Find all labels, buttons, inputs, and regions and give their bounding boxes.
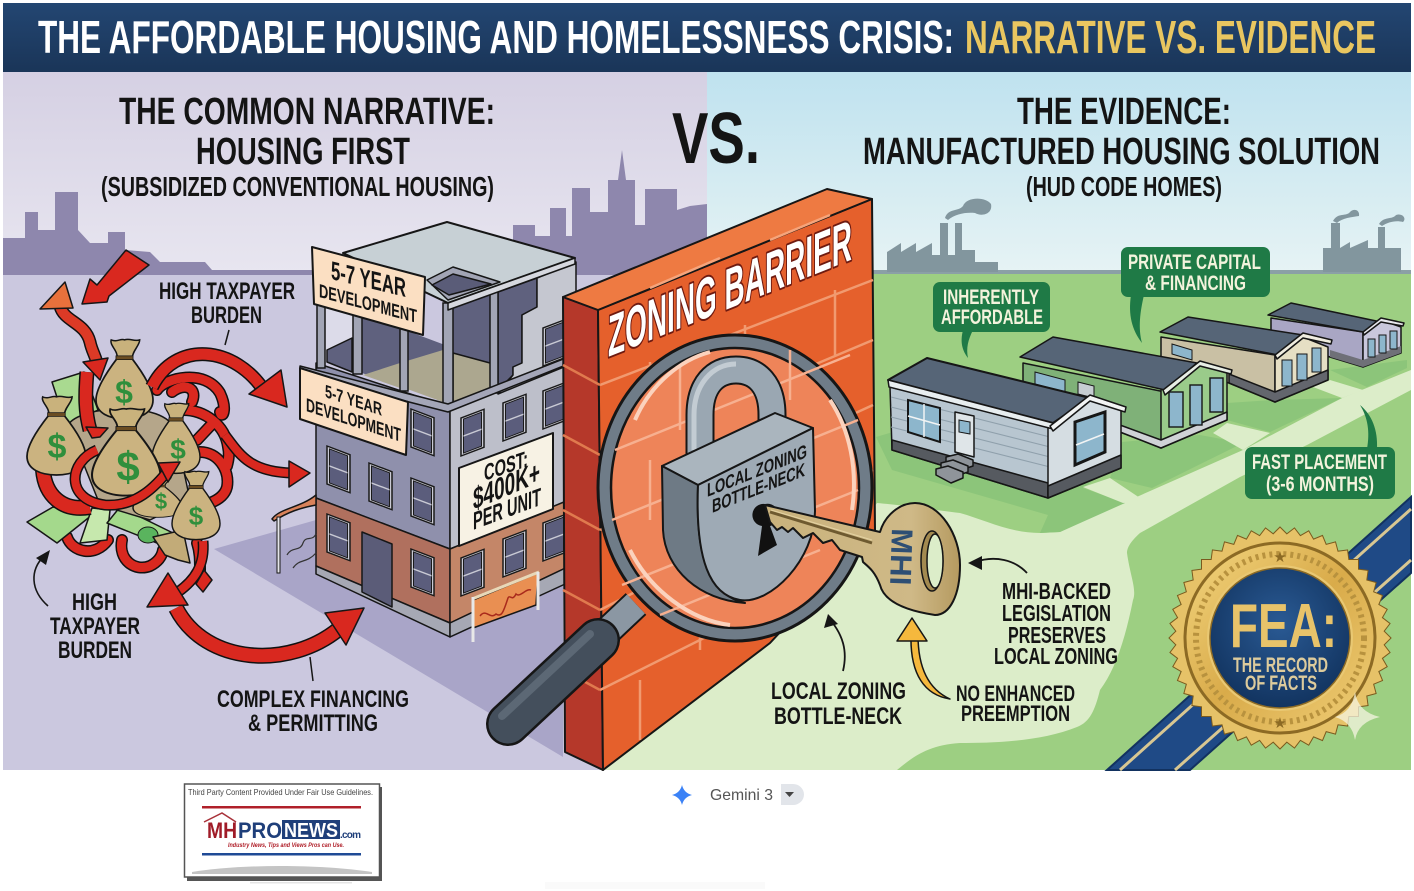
seal: fea record of facts: ★ [1273, 549, 1287, 566]
arrow: local zoning [824, 614, 845, 671]
callout: inherently affordable [933, 282, 1050, 358]
callout: private capital [1121, 247, 1270, 343]
header band [3, 3, 1411, 72]
front window [1075, 412, 1105, 465]
label: complex financing: & PERMITTING [248, 710, 378, 737]
heading: the evidence: THE EVIDENCE: [1017, 91, 1231, 133]
label: complex financing: COMPLEX FINANCING [217, 686, 409, 713]
label: high taxpayer burden left [34, 550, 140, 664]
sign: cost per unit: $400K+ [473, 454, 540, 517]
label: local zoning bottle-neck: LOCAL ZONING [771, 678, 906, 705]
arrow: orange up squiggle [40, 282, 108, 380]
magnifying glass [502, 335, 872, 724]
sign: cost per unit: COST: [484, 447, 528, 487]
sign: 5-7 year development upper: 5-7 YEAR [331, 255, 406, 303]
callout: private capital: PRIVATE CAPITAL [1128, 251, 1261, 274]
back swirls [60, 378, 229, 570]
shackle [694, 364, 772, 465]
padlock label: LOCAL ZONING [707, 441, 807, 502]
skyline right [500, 150, 707, 275]
brown backing [68, 409, 190, 520]
side window [908, 400, 940, 442]
headings left: HOUSING FIRST [196, 131, 410, 173]
footer: mhpronews logo: NEWS [284, 820, 338, 842]
headings right [863, 91, 1380, 202]
seal: fea record of facts [1170, 528, 1390, 748]
money bag cluster with swirling arrows [27, 250, 364, 656]
skyline left [3, 192, 320, 275]
label: high taxpayer burden left: BURDEN [58, 637, 132, 664]
building [272, 222, 576, 642]
padlock [662, 364, 815, 603]
top storey open frame [317, 262, 576, 409]
awning [272, 495, 316, 573]
ribbon [1107, 497, 1411, 770]
seal: fea record of facts: FEA: [1230, 592, 1337, 661]
roof [343, 222, 575, 303]
label: mhi-backed legislation: MHI-BACKED [1002, 578, 1111, 604]
pads [876, 360, 1407, 533]
seal: fea record of facts: ★ [1273, 715, 1287, 732]
left thick arc [43, 470, 90, 508]
handle [502, 604, 636, 724]
brick mortar [563, 215, 873, 740]
label: high taxpayer burden top: HIGH TAXPAYER [159, 278, 295, 305]
label: mhi-backed legislation [994, 578, 1118, 669]
headings left: (SUBSIDIZED CONVENTIONAL HOUSING) [101, 171, 494, 202]
callout: fast placement: (3-6 MONTHS) [1266, 473, 1374, 496]
money bag cluster with swirling arrows: $ [155, 489, 167, 514]
sign: cost per unit: PER UNIT [473, 484, 541, 536]
heading: the common narrative: THE COMMON NARRATIVE: [119, 91, 495, 133]
door [955, 412, 974, 457]
sign: 5-7 year development lower: 5-7 YEAR [325, 380, 382, 420]
label: mhi-backed legislation: PRESERVES [1008, 622, 1106, 648]
seal: fea record of facts: THE RECORD [1233, 654, 1328, 677]
arrow: large bottom sweep [176, 608, 364, 656]
arrow: yellow no preemption [897, 618, 950, 699]
door [362, 532, 392, 607]
sign: 5-7 year development lower: DEVELOPMENT [306, 394, 401, 447]
money bags: $ [115, 374, 133, 410]
lens [598, 335, 872, 641]
padlock label [707, 441, 807, 518]
label: high taxpayer burden left: TAXPAYER [50, 613, 140, 640]
arrow into bags [86, 372, 90, 430]
money bags: $ [189, 501, 204, 531]
windows [327, 319, 566, 596]
house 1 blue [888, 358, 1126, 498]
key [765, 503, 960, 615]
arrow: down-left [147, 541, 212, 607]
money bags: $ [170, 434, 186, 465]
label: mhi-backed legislation: LEGISLATION [1002, 600, 1111, 626]
panel: common narrative (left) [3, 72, 707, 770]
headings right: (HUD CODE HOMES) [1026, 171, 1222, 202]
label: no enhanced preemption: NO ENHANCED [956, 681, 1075, 706]
callout: fast placement [1245, 405, 1395, 499]
zoning wall: ZONING BARRIER [608, 206, 852, 370]
construction sign [472, 572, 539, 642]
padlock label: BOTTLE-NECK [712, 459, 805, 518]
sign: cost per unit [459, 433, 553, 546]
sign: 5-7 year development upper [312, 247, 425, 335]
money bags: $ [116, 443, 140, 490]
footer: gemini tag [672, 784, 804, 805]
label: mhi-backed legislation: LOCAL ZONING [994, 643, 1118, 669]
arrow: to middle storey [225, 435, 310, 487]
label: high taxpayer burden left: HIGH [72, 589, 117, 616]
arrow: mhi-backed [968, 556, 1027, 573]
house 2 green [1020, 337, 1232, 448]
label: no enhanced preemption [956, 681, 1075, 726]
title: THE AFFORDABLE HOUSING AND HOMELESSNESS CRISIS: [38, 11, 954, 63]
factories [887, 199, 1404, 272]
floor ledge [300, 354, 576, 412]
callout: private capital: & FINANCING [1145, 272, 1246, 295]
steps [936, 454, 973, 483]
label: no enhanced preemption: PREEMPTION [961, 701, 1070, 726]
sign: 5-7 year development lower [300, 368, 408, 455]
money bags: $ [48, 428, 67, 466]
callout: inherently affordable: INHERENTLY [943, 286, 1039, 309]
icon: gemini star [672, 785, 692, 805]
footer: mhpronews logo [184, 784, 382, 884]
building right face [450, 360, 576, 549]
footer: mhpronews logo: .com [340, 830, 361, 841]
label: complex financing [217, 657, 409, 737]
house 3 beige [1160, 317, 1332, 402]
panel: evidence (right) background [603, 72, 1411, 770]
label: local zoning bottle-neck: BOTTLE-NECK [774, 703, 902, 730]
zoning wall [563, 189, 875, 770]
dollar bills [27, 372, 190, 563]
vs: VS. [672, 99, 760, 179]
footer: mhpronews logo: Third Party Content Provided Under Fair Use Guidelines. [188, 787, 373, 797]
keyhole [752, 504, 779, 556]
footer: mhpronews logo: Industry News, Tips and Views Pros can Use. [228, 842, 344, 849]
sparkle [1335, 692, 1380, 740]
front sweep arrow [75, 450, 170, 505]
footer: gemini tag: Gemini 3 [710, 787, 773, 804]
label: high taxpayer burden top [159, 278, 295, 345]
arrow: to upper storey [152, 354, 287, 407]
key label: MHI [883, 528, 918, 586]
sign: 5-7 year development upper: DEVELOPMENT [319, 281, 417, 328]
pale ground and road [603, 370, 1411, 770]
headings left [101, 91, 495, 202]
footer: mhpronews logo: PRO [238, 818, 282, 843]
house 4 lavender [1268, 303, 1404, 367]
seal: fea record of facts: OF FACTS [1245, 672, 1317, 695]
label: local zoning bottle-neck [771, 678, 906, 730]
money bags [27, 339, 220, 540]
footer: mhpronews logo: MH [207, 818, 237, 843]
cross paths [1083, 380, 1363, 503]
label: high taxpayer burden top: BURDEN [191, 302, 262, 329]
arrow: top straight [82, 250, 149, 304]
building left face [316, 363, 450, 549]
callout: inherently affordable: AFFORDABLE [941, 306, 1043, 329]
ground shadow [214, 520, 563, 757]
